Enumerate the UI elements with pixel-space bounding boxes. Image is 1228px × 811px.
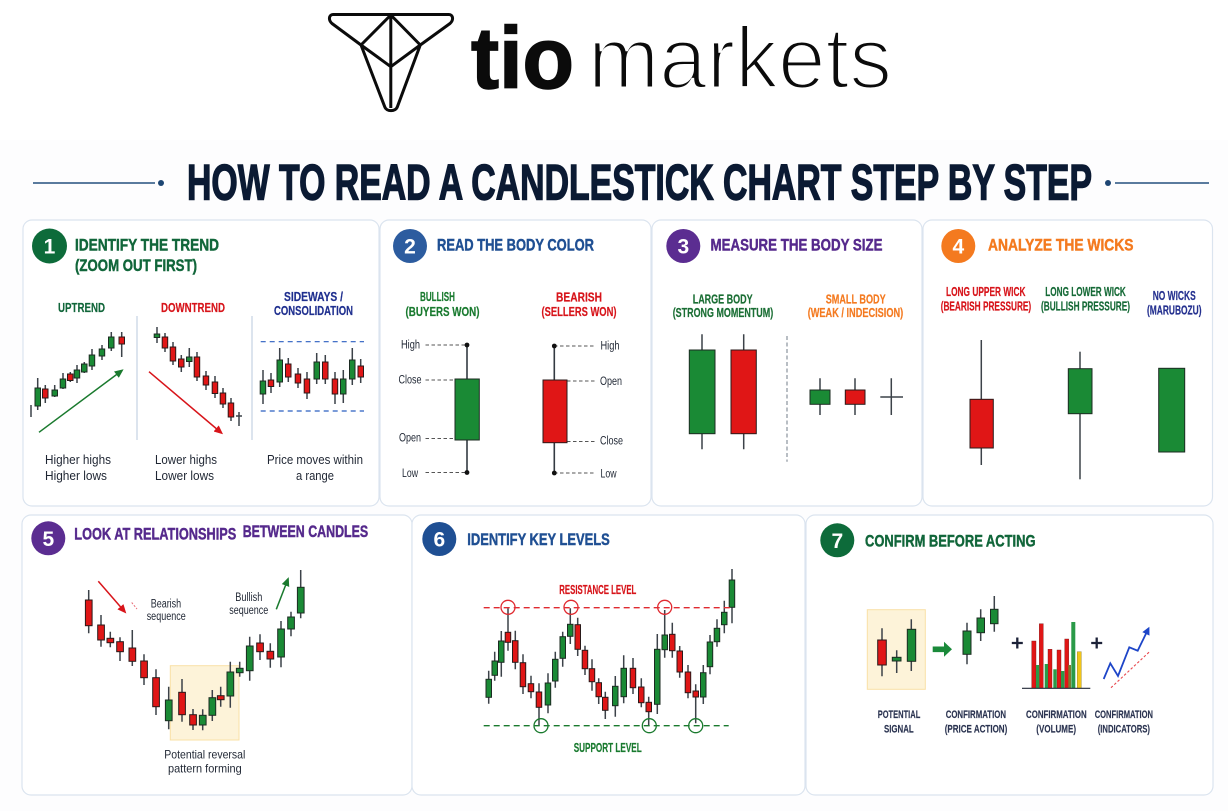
diagram: bearish candle: Open: [600, 376, 622, 388]
potential signal box: [867, 610, 925, 689]
heading: identify key levels: IDENTIFY KEY LEVELS: [467, 531, 610, 549]
caption: sideways: [267, 453, 363, 483]
caption: downtrend: [155, 453, 217, 483]
caption: uptrend: Higher highs: [45, 453, 111, 467]
candle: long upper wick: [970, 340, 993, 465]
step number 7: [820, 523, 854, 557]
step number 7: 7: [831, 530, 843, 553]
logo wordmark: tio: [471, 10, 574, 107]
candles: large bodies: [689, 334, 756, 449]
heading: look at relationships between candles: BETWEEN CANDLES: [243, 523, 368, 541]
chart: indicators line: [1104, 628, 1150, 688]
step number 6: 6: [433, 528, 445, 552]
caption: uptrend: [45, 453, 111, 483]
plus sign: [1091, 638, 1102, 648]
caption: downtrend: Lower highs: [155, 453, 217, 467]
label: bullish sequence: sequence: [229, 605, 268, 617]
step number 4: [941, 229, 975, 263]
step number 2: [393, 229, 427, 263]
label: no wicks: (MARUBOZU): [1147, 304, 1202, 318]
label: confirmation volume: [1026, 709, 1087, 736]
panel: 6 identify key levels: [412, 515, 805, 795]
diagram: bearish candle: Low: [600, 468, 617, 480]
label: bearish sequence: Bearish: [151, 598, 181, 610]
chart: uptrend candles: [31, 332, 124, 432]
panel: 2 read the body color: [380, 220, 651, 506]
label: potential signal: POTENTIAL: [878, 709, 920, 721]
step number 1: 1: [44, 236, 56, 258]
label: long lower wick: [1041, 285, 1130, 314]
label: confirmation price action: [945, 709, 1008, 736]
caption: uptrend: Higher lows: [45, 469, 107, 483]
arrow: bearish: [98, 581, 137, 612]
label: sideways: [274, 290, 353, 318]
candles: small bodies: [810, 378, 903, 415]
step number 3: [666, 229, 700, 263]
panel: 7 confirm before acting: [806, 515, 1213, 795]
label: bearish: BEARISH: [556, 290, 602, 304]
label: downtrend: DOWNTREND: [161, 301, 225, 315]
panel: 5 look at relationships between candles: [22, 515, 412, 795]
label: no wicks: [1147, 289, 1202, 318]
label: support level: SUPPORT LEVEL: [574, 741, 642, 755]
label: no wicks: NO WICKS: [1153, 289, 1196, 303]
label: confirmation price action: CONFIRMATION: [946, 709, 1006, 721]
label: large body: [673, 292, 773, 320]
heading: identify the trend: IDENTIFY THE TREND: [75, 236, 219, 254]
step number 4: 4: [952, 236, 964, 258]
heading: read the body color: READ THE BODY COLOR: [437, 236, 594, 254]
heading: identify the trend: [75, 236, 219, 275]
label: confirmation indicators: CONFIRMATION: [1095, 709, 1153, 721]
label: confirmation indicators: [1095, 709, 1153, 736]
chart: price with levels: [484, 569, 735, 733]
label: confirmation indicators: (INDICATORS): [1098, 724, 1150, 736]
label: long upper wick: [941, 285, 1031, 314]
step number 6: [422, 522, 456, 556]
heading: identify the trend: (ZOOM OUT FIRST): [75, 257, 197, 275]
label: bullish sequence: Bullish: [235, 592, 262, 604]
logo: tiomarkets: [329, 10, 892, 111]
label: large body: LARGE BODY: [693, 292, 753, 306]
heading: measure the body size: MEASURE THE BODY SIZE: [710, 236, 882, 254]
caption: sideways: a range: [296, 469, 334, 483]
step number 3: 3: [677, 236, 689, 258]
diagram: bullish candle: Close: [398, 374, 422, 386]
chart: downtrend candles: [149, 327, 242, 433]
label: long lower wick: LONG LOWER WICK: [1045, 285, 1126, 299]
diagram: bearish candle: High: [600, 340, 620, 352]
label: potential signal: SIGNAL: [884, 724, 914, 736]
label: bullish: BULLISH: [420, 290, 455, 304]
step number 5: 5: [42, 528, 54, 551]
panel: 1 identify the trend: [23, 220, 379, 506]
heading: look at relationships between candles: LOOK AT RELATIONSHIPS: [74, 526, 236, 544]
chart: reversal candles: [85, 570, 304, 730]
highlight: reversal zone: [170, 666, 239, 740]
label: small body: [808, 292, 903, 320]
heading: analyze the wicks: ANALYZE THE WICKS: [988, 236, 1134, 254]
support line with touch points: [484, 719, 729, 733]
diagram: bullish candle: High: [401, 340, 420, 352]
label: bullish: (BUYERS WON): [406, 305, 480, 319]
label: sideways: SIDEWAYS /: [284, 290, 343, 304]
chart: sideways candles: [260, 342, 364, 411]
heading: confirm before acting: CONFIRM BEFORE ACTING: [865, 532, 1036, 550]
step number 1: [32, 228, 67, 264]
label: small body: (WEAK / INDECISION): [808, 306, 903, 320]
label: uptrend: UPTREND: [58, 301, 105, 315]
heading: look at relationships between candles: [74, 523, 368, 544]
label: long lower wick: (BULLISH PRESSURE): [1041, 300, 1130, 314]
resistance line with touch points: [484, 600, 734, 614]
panel: 3 measure the body size: [652, 220, 922, 506]
diagram: bullish candle: [398, 340, 479, 480]
arrow: down: [149, 372, 222, 433]
label: long upper wick: LONG UPPER WICK: [946, 285, 1026, 299]
caption: downtrend: Lower lows: [155, 469, 214, 483]
diagram: bearish candle: [543, 340, 623, 480]
label: small body: SMALL BODY: [826, 292, 886, 306]
label: confirmation volume: CONFIRMATION: [1026, 709, 1087, 721]
label: potential reversal: pattern forming: [168, 762, 242, 776]
label: bearish sequence: [147, 598, 186, 623]
step number 5: [31, 521, 65, 555]
candle: long lower wick: [1068, 352, 1092, 479]
diagram: bullish candle: Open: [399, 432, 421, 444]
label: bullish: [406, 290, 480, 319]
arrow: up: [39, 370, 122, 432]
candles: price action confirmation: [963, 596, 998, 664]
diagram: bearish candle: Close: [600, 436, 623, 448]
icon: tiomarkets emblem: [329, 14, 453, 111]
arrow: bullish: [276, 579, 288, 609]
caption: sideways: Price moves within: [267, 453, 363, 467]
label: potential reversal: Potential reversal: [164, 748, 245, 762]
label: bullish sequence: [229, 592, 268, 617]
label: potential signal: [878, 709, 920, 736]
label: bearish: [542, 290, 616, 319]
logo wordmark: markets: [588, 10, 892, 107]
panel: 4 analyze the wicks: [923, 220, 1212, 506]
diagram: bullish candle: Low: [402, 468, 419, 480]
arrow: to confirmation: [933, 642, 952, 657]
label: large body: (STRONG MOMENTUM): [673, 306, 773, 320]
label: confirmation volume: (VOLUME): [1036, 724, 1076, 736]
label: long upper wick: (BEARISH PRESSURE): [941, 300, 1031, 314]
label: bearish sequence: sequence: [147, 611, 186, 623]
label: resistance level: RESISTANCE LEVEL: [559, 583, 637, 597]
plus sign: [1012, 638, 1023, 648]
label: sideways: CONSOLIDATION: [274, 304, 353, 318]
chart: volume bars: [1022, 622, 1090, 688]
candle: marubozu: [1159, 368, 1185, 452]
label: potential reversal: [164, 748, 245, 776]
step number 2: 2: [404, 236, 416, 258]
label: bearish: (SELLERS WON): [542, 305, 616, 319]
label: confirmation price action: (PRICE ACTION): [945, 724, 1008, 736]
